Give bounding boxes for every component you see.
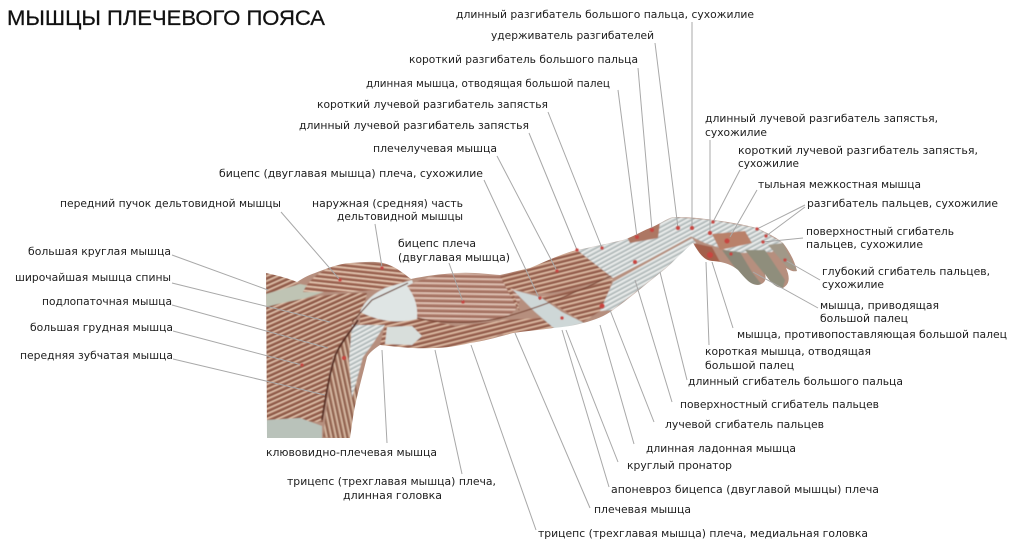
- labels: left column: передняя зубчатая мышца: [20, 349, 173, 362]
- labels: top fan: бицепс плеча: [398, 237, 476, 250]
- labels: bottom fan: трицепс (трехглавая мышца) плеча,: [287, 475, 496, 488]
- labels: top fan: (двуглавая мышца): [398, 251, 510, 264]
- labels: right side: короткий лучевой разгибатель запястья,: [738, 144, 978, 157]
- labels: top fan: удерживатель разгибателей: [491, 29, 654, 42]
- labels: left column: большая круглая мышца: [28, 245, 171, 258]
- labels: right side: сухожилие: [705, 126, 767, 139]
- labels: left column: [15, 245, 173, 362]
- labels: top fan: бицепс (двуглавая мышца) плеча, сухожилие: [219, 167, 483, 180]
- illustration: muscles of arm and shoulder: [266, 217, 797, 438]
- labels: bottom fan: трицепс (трехглавая мышца) плеча, медиальная головка: [538, 527, 868, 540]
- labels: bottom fan: длинный сгибатель большого пальца: [688, 375, 903, 388]
- labels: left column: подлопаточная мышца: [42, 295, 172, 308]
- labels: top fan: длинный разгибатель большого пальца, сухожилие: [456, 8, 754, 21]
- labels: top fan: наружная (средняя) часть: [312, 197, 463, 210]
- labels: top fan: короткий лучевой разгибатель запястья: [317, 98, 548, 111]
- labels: right side: сухожилие: [822, 278, 884, 291]
- labels: top fan: короткий разгибатель большого пальца: [409, 53, 638, 66]
- labels: bottom fan: клювовидно-плечевая мышца: [266, 446, 437, 459]
- labels: top fan: плечелучевая мышца: [373, 142, 497, 155]
- labels: right side: [705, 112, 1007, 372]
- title: МЫШЦЫ ПЛЕЧЕВОГО ПОЯСА: [7, 7, 325, 30]
- red marker dots: [300, 220, 787, 367]
- labels: right side: разгибатель пальцев, сухожилие: [807, 197, 998, 210]
- labels: right side: короткая мышца, отводящая: [705, 345, 871, 358]
- labels: right side: мышца, приводящая: [820, 299, 939, 312]
- labels: bottom fan: апоневроз бицепса (двуглавой мышцы) плеча: [611, 483, 879, 496]
- labels: top fan: длинный лучевой разгибатель запястья: [299, 119, 529, 132]
- labels: bottom fan: длинная головка: [343, 489, 442, 502]
- labels: top fan: дельтовидной мышцы: [337, 210, 463, 223]
- labels: right side: мышца, противопоставляющая большой палец: [737, 328, 1007, 341]
- labels: bottom fan: лучевой сгибатель пальцев: [665, 418, 824, 431]
- labels: bottom fan: круглый пронатор: [627, 459, 732, 472]
- labels: left column: большая грудная мышца: [30, 321, 173, 334]
- labels: right side: поверхностный сгибатель: [806, 225, 954, 238]
- labels: right side: длинный лучевой разгибатель запястья,: [705, 112, 938, 125]
- labels: top fan: [60, 8, 754, 264]
- labels: right side: большой палец: [820, 312, 908, 325]
- labels: bottom fan: [266, 375, 903, 540]
- labels: bottom fan: длинная ладонная мышца: [646, 442, 796, 455]
- labels: right side: большой палец: [705, 359, 794, 372]
- labels: top fan: длинная мышца, отводящая большой палец: [366, 77, 610, 90]
- labels: top fan: передний пучок дельтовидной мышцы: [60, 197, 281, 210]
- labels: right side: пальцев, сухожилие: [806, 238, 923, 251]
- labels: bottom fan: поверхностный сгибатель пальцев: [680, 398, 879, 411]
- labels: right side: глубокий сгибатель пальцев,: [822, 265, 990, 278]
- labels: left column: широчайшая мышца спины: [15, 271, 171, 284]
- labels: right side: сухожилие: [738, 157, 799, 170]
- labels: right side: тыльная межкостная мышца: [758, 178, 921, 191]
- leader lines: [172, 22, 820, 530]
- labels: bottom fan: плечевая мышца: [594, 503, 691, 516]
